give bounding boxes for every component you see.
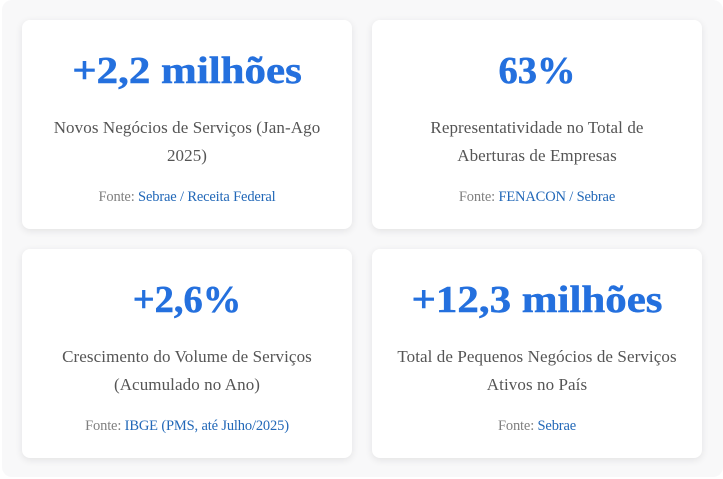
stat: +12,3 milhões: +12,3 milhões [411, 279, 663, 321]
description line 1: Novos Negócios de Serviços (Jan-Ago [54, 118, 320, 137]
description line 2: Ativos no País [487, 375, 587, 394]
source: Fonte: FENACON / Sebrae [459, 189, 615, 205]
stat: +2,2 milhões: +2,2 milhões [72, 50, 302, 92]
description line 2: (Acumulado no Ano) [114, 375, 260, 394]
source: Fonte: IBGE (PMS, até Julho/2025) [85, 418, 289, 434]
description line 1: Crescimento do Volume de Serviços [62, 347, 312, 366]
stat: 63%: 63% [498, 50, 576, 92]
stat: +2,6%: +2,6% [133, 279, 241, 321]
card: total small service businesses [372, 249, 702, 458]
description line 2: 2025) [167, 146, 207, 165]
description line 1: Total de Pequenos Negócios de Serviços [397, 347, 677, 366]
source: Fonte: Sebrae / Receita Federal [98, 189, 276, 205]
card: new service businesses [22, 20, 352, 229]
description line 2: Aberturas de Empresas [457, 146, 617, 165]
card: share of company openings [372, 20, 702, 229]
description line 1: Representatividade no Total de [430, 118, 644, 137]
source: Fonte: Sebrae [498, 418, 576, 434]
card: services volume growth [22, 249, 352, 458]
